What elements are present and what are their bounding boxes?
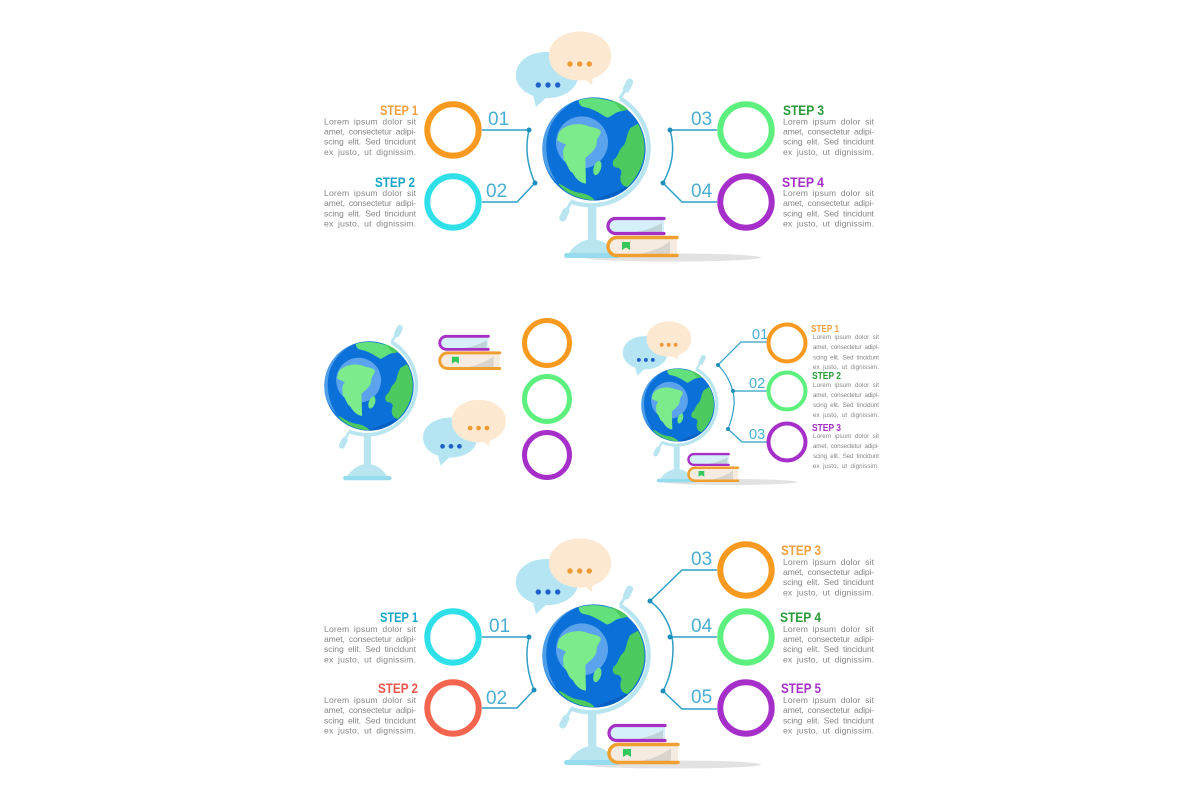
text block: step 4: amet, consectetur adipi- (783, 198, 874, 208)
text block: step 5 (781, 680, 875, 736)
text block: step 1: STEP 1 (380, 102, 418, 118)
text block: step 5: scing elit. Sed tincidunt (783, 716, 875, 726)
text block: step 2: ex justo, ut dignissim. (324, 726, 416, 736)
text block: step 1: amet, consectetur adipi- (813, 344, 879, 351)
text block: step 1: Lorem ipsum dolor sit (324, 624, 417, 634)
panel: four-step template (324, 32, 875, 262)
text block: step 1: ex justo, ut dignissim. (813, 364, 879, 371)
text block: step 2: Lorem ipsum dolor sit (324, 188, 417, 198)
text block: step 4: STEP 4 (780, 609, 821, 625)
number 01: 01 (489, 616, 510, 637)
number 03: 03 (691, 549, 712, 570)
text block: step 2 (324, 680, 418, 736)
text block: step 2: scing elit. Sed tincidunt (813, 402, 879, 409)
icon: speech bubbles (423, 400, 506, 465)
shadow under books (583, 760, 761, 768)
connector: step 3, 4 and 5 lines (648, 570, 717, 709)
text block: step 3: Lorem ipsum dolor sit (783, 116, 875, 126)
text block: step 5: Lorem ipsum dolor sit (783, 695, 875, 705)
shadow under books (583, 254, 761, 262)
text block: step 3: STEP 3 (783, 102, 824, 118)
text block: step 1: scing elit. Sed tincidunt (324, 136, 417, 146)
text block: step 2: ex justo, ut dignissim. (813, 412, 879, 419)
panel: five-step template (324, 538, 875, 768)
ring: orange (524, 320, 570, 366)
icon: stack of books (440, 336, 500, 368)
number 03: 03 (749, 427, 765, 443)
connector: step 1 and 2 lines (482, 128, 538, 202)
text block: step 3: ex justo, ut dignissim. (783, 147, 874, 157)
icon: stack of books (608, 218, 677, 256)
icon: speech bubbles (623, 321, 691, 376)
text block: step 2 (812, 371, 879, 419)
number 01: 01 (488, 109, 509, 130)
number 05: 05 (691, 687, 712, 708)
text block: step 3: ex justo, ut dignissim. (783, 588, 874, 598)
ring: step 4 (720, 611, 772, 663)
text block: step 4: scing elit. Sed tincidunt (783, 644, 875, 654)
text block: step 4: amet, consectetur adipi- (783, 634, 874, 644)
text block: step 3: scing elit. Sed tincidunt (813, 453, 879, 460)
text block: step 1: STEP 1 (380, 609, 418, 625)
text block: step 1: STEP 1 (811, 324, 839, 335)
ring: green (524, 376, 570, 422)
ring: step 1 (427, 611, 479, 663)
text block: step 1 (324, 609, 418, 664)
connector: step 1 and 2 lines (482, 634, 536, 708)
text block: step 3 (783, 102, 875, 157)
text block: step 3 (781, 542, 875, 598)
text block: step 1 (324, 102, 418, 157)
ring: step 2 (427, 176, 479, 228)
number 01: 01 (752, 327, 768, 343)
number 04: 04 (691, 616, 713, 637)
text block: step 3: Lorem ipsum dolor sit (783, 557, 875, 567)
text block: step 4 (782, 174, 875, 228)
text block: step 1: ex justo, ut dignissim. (324, 654, 416, 664)
ring: step 3 (768, 424, 806, 460)
number 02: 02 (486, 688, 507, 709)
text block: step 4: scing elit. Sed tincidunt (783, 208, 875, 218)
shadow under books (663, 479, 797, 485)
text block: step 2 (324, 174, 417, 228)
ring: step 1 (768, 324, 806, 362)
text block: step 2: amet, consectetur adipi- (324, 705, 416, 715)
text block: step 2: Lorem ipsum dolor sit (324, 695, 417, 705)
connector: step lines (716, 342, 767, 442)
text block: step 3: Lorem ipsum dolor sit (813, 433, 879, 440)
text block: step 4: Lorem ipsum dolor sit (783, 624, 875, 634)
text block: step 1: amet, consectetur adipi- (324, 634, 416, 644)
text block: step 2: amet, consectetur adipi- (324, 198, 416, 208)
text block: step 2: amet, consectetur adipi- (813, 392, 879, 399)
text block: step 4: Lorem ipsum dolor sit (783, 188, 875, 198)
text block: step 4 (780, 609, 875, 664)
text block: step 1: amet, consectetur adipi- (324, 126, 416, 136)
connector: step 3 and 4 lines (660, 128, 717, 202)
number 04: 04 (691, 181, 713, 202)
ring: step 3 (720, 544, 772, 596)
text block: step 1 (811, 324, 879, 371)
text block: step 1: scing elit. Sed tincidunt (324, 644, 417, 654)
text block: step 5: amet, consectetur adipi- (783, 705, 874, 715)
text block: step 4: ex justo, ut dignissim. (783, 218, 874, 228)
text block: step 2: STEP 2 (378, 680, 418, 696)
text block: step 3: amet, consectetur adipi- (783, 567, 874, 577)
text block: step 4: STEP 4 (782, 174, 824, 190)
icon: speech bubbles (516, 538, 611, 614)
icon: desk globe (324, 328, 416, 480)
ring: purple (524, 432, 570, 478)
icon: speech bubbles (516, 32, 611, 107)
text block: step 3: amet, consectetur adipi- (813, 443, 879, 450)
number 03: 03 (691, 109, 712, 130)
text block: step 5: ex justo, ut dignissim. (783, 726, 874, 736)
text block: step 4: ex justo, ut dignissim. (783, 654, 874, 664)
icon: desk globe (542, 589, 649, 765)
ring: step 2 (427, 682, 479, 734)
number 02: 02 (486, 181, 507, 202)
text block: step 2: ex justo, ut dignissim. (324, 218, 416, 228)
ring: step 1 (427, 104, 479, 156)
panel: blank template elements (324, 320, 570, 480)
text block: step 1: Lorem ipsum dolor sit (324, 116, 417, 126)
text block: step 2: STEP 2 (375, 174, 415, 190)
icon: desk globe (641, 357, 717, 482)
number 02: 02 (749, 376, 765, 392)
text block: step 2: scing elit. Sed tincidunt (324, 208, 417, 218)
text block: step 1: scing elit. Sed tincidunt (813, 354, 879, 362)
text block: step 3 (812, 423, 879, 470)
text block: step 2: Lorem ipsum dolor sit (813, 382, 879, 389)
ring: step 4 (720, 176, 772, 228)
text block: step 3: STEP 3 (812, 423, 841, 434)
ring: step 2 (768, 372, 806, 410)
text block: step 3: scing elit. Sed tincidunt (783, 136, 875, 146)
text block: step 3: scing elit. Sed tincidunt (783, 577, 875, 587)
ring: step 5 (720, 682, 772, 734)
text block: step 1: Lorem ipsum dolor sit (813, 334, 879, 341)
text block: step 3: ex justo, ut dignissim. (813, 463, 879, 470)
text block: step 2: STEP 2 (812, 371, 841, 382)
icon: desk globe (542, 82, 649, 258)
text block: step 3: STEP 3 (781, 542, 821, 558)
ring: step 3 (720, 104, 772, 156)
icon: stack of books (609, 726, 678, 762)
panel: three-step template (623, 321, 879, 485)
text block: step 3: amet, consectetur adipi- (783, 126, 874, 136)
icon: stack of books (688, 454, 738, 481)
text block: step 2: scing elit. Sed tincidunt (324, 716, 417, 726)
text block: step 1: ex justo, ut dignissim. (324, 147, 416, 157)
text block: step 5: STEP 5 (781, 680, 821, 696)
